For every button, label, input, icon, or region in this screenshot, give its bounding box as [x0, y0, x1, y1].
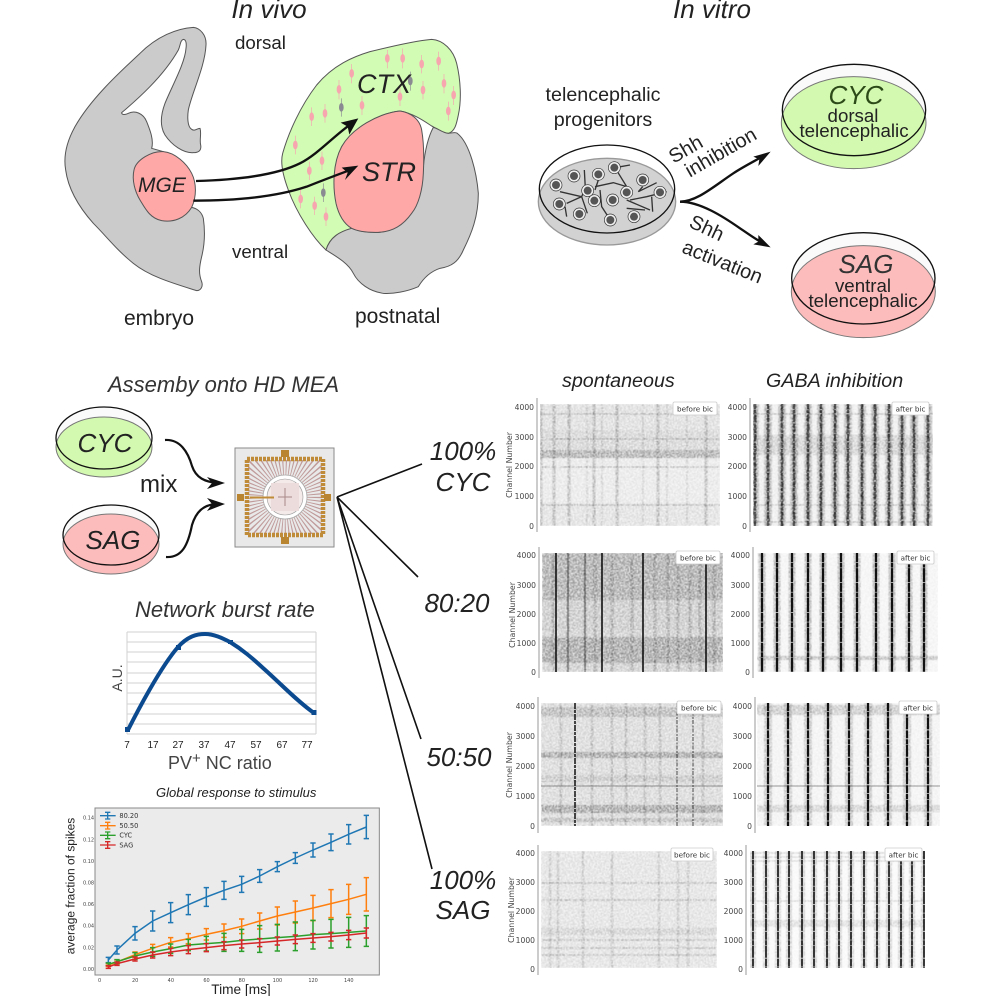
x tick labels: 67: [276, 740, 288, 751]
raster: 80:20 GABA inhibition: after bic: [901, 554, 930, 562]
raster: 50:50 GABA inhibition: 2000: [733, 762, 752, 771]
raster: 50:50 spontaneous: 3000: [516, 732, 535, 741]
connector fan lines: [337, 464, 432, 869]
label: telencephalic progenitors: [546, 84, 661, 131]
embryo brain section: [65, 27, 206, 291]
label: Shh activation: Shh: [686, 211, 727, 246]
dish: CYC dorsal: [781, 64, 926, 169]
raster: 50:50 GABA inhibition: [733, 697, 940, 833]
arrow: MGE to STR: [193, 166, 358, 201]
label: Shh activation: [679, 211, 766, 288]
arrow: Shh activation: [680, 202, 771, 247]
raster: 80:20 spontaneous: 1000: [517, 639, 536, 648]
x tick labels: 40: [168, 978, 174, 984]
raster: 100% CYC spontaneous: 0: [529, 522, 534, 531]
raster: 100% CYC GABA inhibition: 3000: [728, 433, 747, 442]
label: SAG ventral telencephalic: ventral: [835, 275, 891, 296]
x tick labels: 120: [308, 978, 318, 984]
raster: 80:20 spontaneous: 2000: [517, 610, 536, 619]
postnatal grey tissue: [326, 127, 478, 293]
y tick labels: 0.12: [83, 837, 94, 843]
raster: 80:20 spontaneous: 3000: [517, 581, 536, 590]
legend: [100, 812, 138, 849]
dish: CYC: [56, 407, 152, 477]
burst rate curve: [128, 634, 314, 731]
x tick labels: 27: [172, 740, 184, 751]
raster: 100% SAG GABA inhibition: 1000: [724, 936, 743, 945]
raster: 100% CYC spontaneous: [505, 398, 720, 532]
raster: 50:50 spontaneous: 1000: [516, 792, 535, 801]
label: CYC dorsal telencephalic: [799, 80, 909, 141]
series: CYC: [106, 916, 369, 966]
dish: CYC: CYC: [78, 428, 133, 458]
y tick labels: 0.04: [83, 924, 94, 930]
neuron nuclei: [552, 164, 664, 224]
label: 100% CYC: CYC: [436, 467, 491, 497]
dish: SAG ventral: [791, 233, 935, 338]
raster: 100% SAG GABA inhibition: 0: [738, 965, 743, 974]
x tick labels: 60: [203, 978, 210, 984]
neuron cell bodies: [550, 162, 666, 226]
raster: 100% SAG GABA inhibition: [724, 845, 925, 975]
heading: GABA inhibition: GABA inhibition: [766, 370, 903, 392]
label: telencephalic progenitors: progenitors: [554, 109, 652, 131]
progenitor dish: [538, 145, 676, 245]
chart: global response to stimulus: [64, 808, 379, 996]
raster: 100% CYC spontaneous: 2000: [515, 462, 534, 471]
raster: 80:20 GABA inhibition: 4000: [731, 551, 750, 560]
legend: SAG: [119, 841, 133, 849]
heading: spontaneous: spontaneous: [562, 370, 675, 392]
raster: 100% CYC GABA inhibition: 2000: [728, 462, 747, 471]
raster: 100% SAG spontaneous: 2000: [516, 907, 535, 916]
label: 100% SAG: SAG: [436, 895, 490, 925]
x tick labels: 140: [344, 978, 354, 984]
label: Shh inhibition: inhibition: [681, 124, 761, 182]
arrow: Shh inhibition: [680, 152, 771, 202]
dish: SAG: [63, 505, 159, 574]
raster: 100% SAG GABA inhibition: 4000: [724, 849, 743, 858]
raster: 50:50 GABA inhibition: after bic: [903, 704, 933, 712]
heading: Global response to stimulus: Global response to stimulus: [156, 785, 317, 800]
label: SAG ventral telencephalic: SAG: [839, 249, 893, 279]
x axis label: PV+ NC ratio: PV: [168, 753, 192, 773]
raster: 100% CYC spontaneous: 4000: [515, 403, 534, 412]
raster: 50:50 spontaneous: [505, 697, 723, 833]
x axis label: PV+ NC ratio: +: [192, 750, 201, 767]
raster: 100% CYC spontaneous: 1000: [515, 492, 534, 501]
label: CYC dorsal telencephalic: dorsal: [828, 105, 878, 126]
raster: 100% SAG spontaneous: 1000: [516, 936, 535, 945]
raster: 80:20 spontaneous: before bic: [680, 554, 716, 562]
series: 80.20: [106, 815, 369, 963]
label: 80:20: 80:20: [424, 588, 490, 618]
legend: CYC: [119, 832, 133, 840]
label: MGE: MGE: [138, 174, 187, 197]
raster: 100% SAG spontaneous: Channel Number: [507, 876, 516, 943]
cortex region: [282, 39, 460, 250]
label: Shh activation: activation: [679, 236, 766, 288]
raster: 50:50 spontaneous: 0: [530, 822, 535, 831]
dish: SAG: SAG: [86, 525, 140, 555]
label: SAG ventral telencephalic: telencephalic: [808, 290, 918, 311]
raster: 80:20 spontaneous: [508, 547, 723, 678]
heading: Network burst rate: Network burst rate: [135, 597, 315, 622]
raster: 80:20 spontaneous: 0: [531, 668, 536, 677]
raster: 50:50 GABA inhibition: 0: [747, 822, 752, 831]
label: telencephalic progenitors: telencephalic: [546, 84, 661, 106]
label: embryo: embryo: [124, 307, 194, 330]
label: Shh inhibition: Shh: [665, 131, 707, 168]
raster: 100% CYC spontaneous: Channel Number: [505, 431, 514, 498]
raster: 100% SAG GABA inhibition: 2000: [724, 907, 743, 916]
label: 100% SAG: [430, 865, 496, 925]
raster: 100% CYC GABA inhibition: after bic: [896, 404, 925, 414]
raster: 100% SAG spontaneous: 3000: [516, 878, 535, 887]
label: SAG ventral telencephalic: [808, 249, 918, 311]
label: CYC dorsal telencephalic: CYC: [829, 80, 884, 110]
raster: 50:50 spontaneous: before bic: [681, 704, 717, 712]
raster: 100% CYC GABA inhibition: 1000: [728, 492, 747, 501]
raster: 100% CYC spontaneous: 3000: [515, 433, 534, 442]
raster: 80:20 GABA inhibition: 0: [745, 668, 750, 677]
panel: in vivo brains: [65, 27, 478, 293]
label: 100% CYC: [430, 436, 496, 497]
y tick labels: [83, 816, 94, 973]
raster: 50:50 spontaneous: 4000: [516, 702, 535, 711]
x tick labels: 17: [147, 740, 159, 751]
y tick labels: 0.06: [83, 902, 94, 908]
legend: 50.50: [119, 822, 138, 830]
label: STR: STR: [362, 157, 416, 187]
striatum region: [334, 111, 424, 232]
arrow: MGE to CTX: [196, 118, 358, 181]
series: SAG: [106, 928, 369, 968]
y axis label: A.U.: A.U.: [109, 664, 125, 692]
raster: 80:20 spontaneous: Channel Number: [508, 581, 517, 648]
raster: 50:50 GABA inhibition: 4000: [733, 702, 752, 711]
MGE region: [133, 152, 195, 221]
x tick labels: 47: [224, 740, 236, 751]
raster: 100% SAG spontaneous: [507, 845, 717, 975]
raster: 50:50 spontaneous: Channel Number: [505, 731, 514, 798]
y tick labels: 0.14: [83, 816, 94, 822]
label: CYC dorsal telencephalic: telencephalic: [799, 120, 909, 141]
pink interneurons: [293, 48, 456, 226]
neuron processes: [560, 165, 667, 220]
raster: 100% SAG spontaneous: before bic: [674, 850, 710, 860]
raster: 50:50 GABA inhibition: 1000: [733, 792, 752, 801]
raster: 80:20 GABA inhibition: [731, 547, 938, 678]
x tick labels: [98, 978, 354, 984]
raster: 50:50 spontaneous: 2000: [516, 762, 535, 771]
label: dorsal: dorsal: [235, 32, 286, 53]
x tick labels: 77: [301, 740, 313, 751]
arrow: SAG to MEA: [166, 498, 225, 557]
raster: 80:20 GABA inhibition: 2000: [731, 610, 750, 619]
raster: 100% SAG GABA inhibition: 3000: [724, 878, 743, 887]
raster: 100% CYC GABA inhibition: [728, 398, 933, 532]
x tick labels: [124, 740, 313, 751]
y tick labels: 0.02: [83, 945, 94, 951]
label: postnatal: postnatal: [355, 305, 440, 328]
label: 100% SAG: 100%: [430, 865, 496, 895]
label: CTX: CTX: [357, 69, 412, 99]
label: 50:50: 50:50: [426, 742, 492, 772]
line chart: network burst rate: [124, 632, 316, 751]
raster: 80:20 spontaneous: 4000: [517, 551, 536, 560]
x tick labels: 7: [124, 740, 130, 751]
series: 50.50: [106, 878, 369, 966]
y tick labels: 0.10: [83, 859, 94, 865]
data markers: [125, 640, 316, 732]
label: mix: mix: [140, 471, 177, 498]
raster: 100% CYC GABA inhibition: 0: [742, 522, 747, 531]
MEA chip: [235, 448, 334, 547]
panel: in vitro differentiation: [538, 64, 935, 338]
grey interneurons: [321, 72, 412, 202]
arrow: CYC to MEA: [165, 440, 225, 489]
raster: 50:50 GABA inhibition: 3000: [733, 732, 752, 741]
x tick labels: 37: [198, 740, 210, 751]
x tick labels: 80: [239, 978, 245, 984]
x axis label: PV+ NC ratio: NC ratio: [201, 753, 272, 773]
x tick labels: 0: [98, 978, 101, 984]
raster: 80:20 GABA inhibition: 1000: [731, 639, 750, 648]
raster: 100% SAG spontaneous: 4000: [516, 849, 535, 858]
raster: 100% SAG spontaneous: 0: [530, 965, 535, 974]
y axis title: average fraction of spikes: [64, 818, 78, 954]
raster: 100% SAG GABA inhibition: after bic: [889, 850, 918, 860]
raster: 80:20 GABA inhibition: 3000: [731, 581, 750, 590]
raster: 100% CYC GABA inhibition: 4000: [728, 403, 747, 412]
legend: 80.20: [119, 812, 138, 820]
y tick labels: 0.00: [83, 967, 94, 973]
x tick labels: 20: [132, 978, 138, 984]
x tick labels: 100: [273, 978, 282, 984]
raster: 100% CYC spontaneous: before bic: [677, 404, 713, 414]
y tick labels: 0.08: [83, 881, 94, 887]
label: 100% CYC: 100%: [430, 436, 496, 466]
plot background: [95, 808, 379, 975]
heading: Assemby onto HD MEA: Assemby onto HD MEA: [106, 372, 339, 397]
x tick labels: 57: [250, 740, 262, 751]
label: ventral: ventral: [232, 241, 288, 262]
